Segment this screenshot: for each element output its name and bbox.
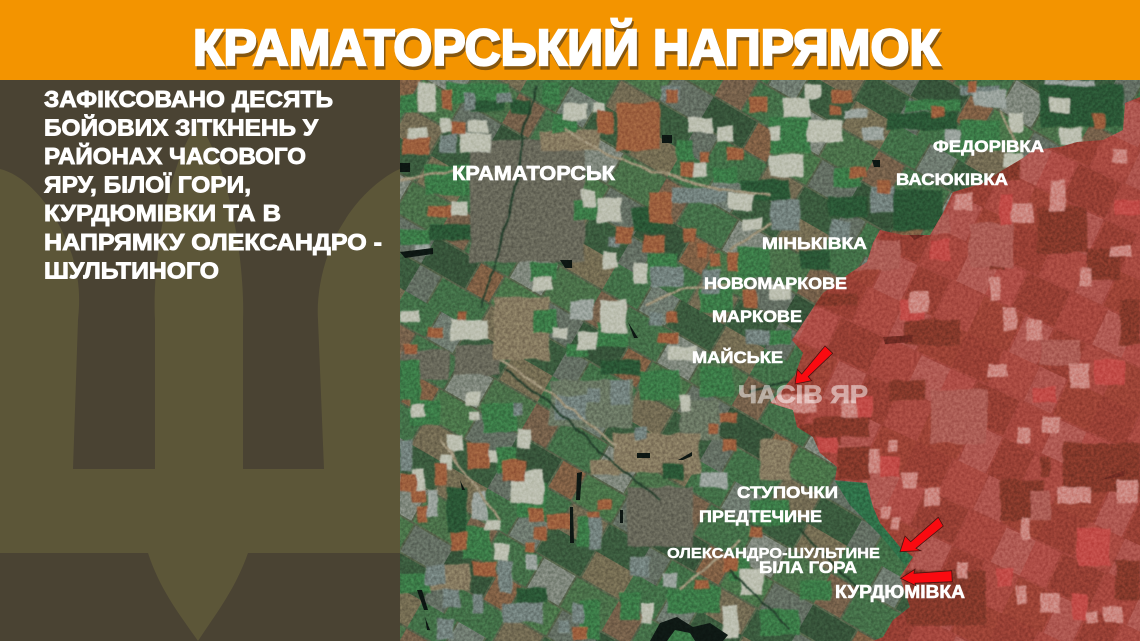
- label: Ступочки: СТУПОЧКИ: [737, 483, 838, 502]
- label: Курдюмівка: КУРДЮМІВКА: [835, 582, 965, 602]
- label: Часів Яр: ЧАСІВ ЯР: [738, 381, 868, 409]
- ponds: [400, 135, 880, 630]
- text block: battle summary: РАЙОНАХ ЧАСОВОГО: [44, 142, 306, 169]
- label: Васюківка: ВАСЮКІВКА: [896, 170, 1008, 189]
- title: КРАМАТОРСЬКИЙ НАПРЯМОК: [193, 18, 941, 76]
- occupied territory red overlay: [770, 90, 1140, 641]
- panel: left text panel with trident: [0, 80, 400, 641]
- green band along the front line: [835, 481, 915, 565]
- arrow: toward Oleksandro-Shultyne: [900, 517, 943, 552]
- text block: battle summary: КУРДЮМІВКИ ТА В: [44, 200, 281, 226]
- header band: [0, 0, 1140, 80]
- texture grain: [400, 80, 1140, 641]
- text block: battle summary: ШУЛЬТИНОГО: [44, 258, 219, 284]
- label: Новомаркове: НОВОМАРКОВЕ: [704, 274, 847, 293]
- text block: battle summary: ЗАФІКСОВАНО ДЕСЯТЬ: [44, 86, 333, 112]
- farmland fields: [400, 80, 1123, 640]
- label: Маркове: МАРКОВЕ: [712, 307, 802, 326]
- text block: battle summary: БОЙОВИХ ЗІТКНЕНЬ У: [44, 114, 318, 140]
- label: Майське: МАЙСЬКЕ: [692, 348, 783, 367]
- label: Олександро-Шультине: ОЛЕКСАНДРО-ШУЛЬТИНЕ: [667, 545, 880, 562]
- text block: battle summary: НАПРЯМКУ ОЛЕКСАНДРО -: [44, 229, 382, 255]
- arrow: toward Bila Hora: [901, 569, 952, 586]
- trident emblem background: [0, 122, 400, 641]
- label: Краматорськ: КРАМАТОРСЬК: [452, 163, 616, 185]
- arrow: toward Chasiv Yar: [795, 346, 833, 384]
- text block: battle summary: [44, 86, 382, 284]
- rivers, ravines and roads: [400, 85, 1020, 630]
- label: Міньківка: МІНЬКІВКА: [762, 234, 867, 253]
- dark strip in occupied zone: [883, 225, 1125, 480]
- label: Біла Гора: БІЛА ГОРА: [759, 558, 857, 577]
- text block: battle summary: ЯРУ, БІЛОЇ ГОРИ,: [44, 172, 251, 198]
- panel: satellite map: [400, 80, 1140, 641]
- label: Федорівка: ФЕДОРІВКА: [933, 137, 1044, 156]
- lake at bottom: [650, 617, 728, 641]
- label: Предтечине: ПРЕДТЕЧИНЕ: [699, 507, 822, 526]
